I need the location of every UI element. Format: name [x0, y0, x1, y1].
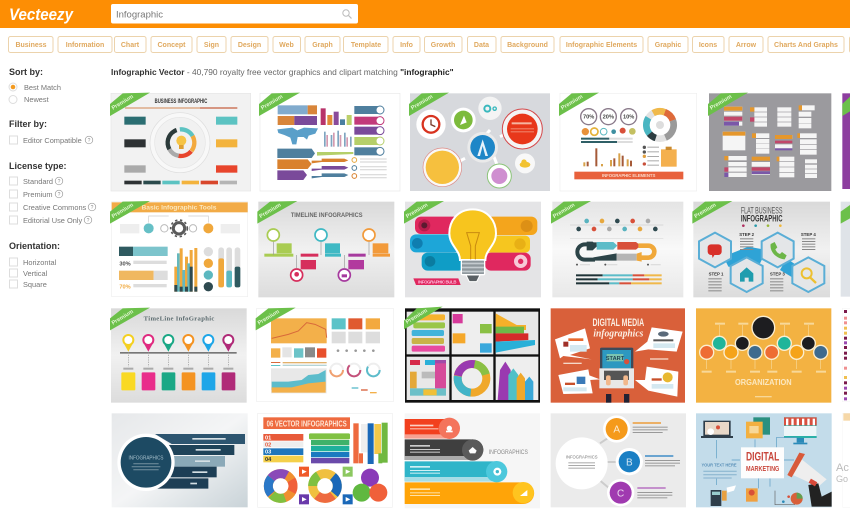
- thumbnail: 06 vector infographics: 06 VECTOR INFOGRAPHICS: [267, 418, 347, 428]
- thumbnail: digital marketing: DIGITAL: [746, 450, 779, 464]
- filter by: ?: [88, 138, 91, 144]
- thumbnail: network circles infographic: [409, 93, 550, 191]
- thumbnail: 06 vector infographics: 01: [265, 435, 271, 441]
- filter by: Editor Compatible: [23, 136, 82, 145]
- tag row: Information: [66, 42, 104, 49]
- thumbnail: flat business infographic: STEP 2: [739, 232, 755, 237]
- thumbnail: 06 vector infographics: 02: [265, 443, 271, 449]
- license type: ?: [91, 205, 94, 211]
- tag row: Concept: [158, 42, 186, 49]
- premium ribbon: Premium: [709, 94, 733, 112]
- thumbnail: digital marketing: [696, 413, 832, 507]
- premium ribbon: Premium: [257, 309, 281, 327]
- thumbnail: black grid of charts: [404, 307, 540, 403]
- tag row: Arrow: [736, 42, 757, 49]
- thumbnail: infographic elements: [559, 93, 697, 191]
- license type: [9, 161, 96, 225]
- tag row: Icons: [699, 42, 717, 49]
- premium ribbon: Premium: [260, 94, 284, 112]
- tag row: Growth: [431, 42, 455, 49]
- thumbnail: timeline pins: [110, 308, 247, 403]
- premium ribbon: Premium: [552, 202, 576, 220]
- premium ribbon: [409, 93, 449, 116]
- thumbnail: light bulb infographic: [404, 201, 541, 297]
- thumbnail: infographic elements: 20%: [603, 115, 614, 121]
- license type: Premium: [23, 190, 53, 199]
- license type: Standard: [23, 177, 53, 186]
- tag row: Graphic: [655, 42, 681, 49]
- premium ribbon: Premium: [111, 202, 135, 220]
- orientation: Square: [23, 280, 47, 289]
- license type: Editorial Use Only: [23, 216, 82, 225]
- thumbnail: rounded bands infographics: INFOGRAPHICS: [489, 449, 528, 456]
- thumbnail: infographic elements: 70%: [583, 115, 594, 121]
- premium ribbon: Premium: [111, 94, 135, 112]
- logo: Vecteezy: [9, 5, 74, 24]
- tag row: Template: [351, 42, 381, 49]
- premium ribbon: Premium: [694, 202, 717, 220]
- thumbnail: digital media infographics: DIGITAL MEDIA: [592, 317, 644, 329]
- sidebar filters: [9, 67, 96, 289]
- thumbnail: basic infographic tools: Basic Infographic Tools: [142, 204, 217, 211]
- license type: Creative Commons: [23, 203, 87, 212]
- tag row: Charts And Graphs: [774, 42, 838, 49]
- thumbnail: timeline infographics: [257, 201, 394, 297]
- watermark text: Ac: [836, 462, 849, 474]
- thumbnail: dashboard charts: [256, 308, 393, 402]
- watermark text: Go: [836, 474, 848, 484]
- orientation: Horizontal: [23, 258, 57, 267]
- tag row: Background: [507, 42, 548, 49]
- thumbnail: flat business infographic: STEP 1: [709, 272, 724, 277]
- search box: Infographic: [116, 10, 163, 20]
- thumbnail: purple card, clipped: [842, 93, 850, 189]
- thumbnail: clipped swatch card: [842, 308, 850, 402]
- tag row: Design: [238, 42, 261, 49]
- thumbnail: digital media infographics: infographics: [593, 329, 643, 340]
- thumbnail: organization chart: ORGANIZATION: [735, 378, 792, 387]
- tag row: Graph: [312, 42, 333, 49]
- thumbnail: A B C circles: [551, 413, 686, 507]
- orientation: Vertical: [23, 269, 48, 278]
- tag row: Sign: [204, 42, 219, 49]
- header bar: [0, 0, 850, 28]
- license type: ?: [58, 192, 61, 198]
- thumbnail: A B C circles: INFOGRAPHICS: [566, 454, 598, 460]
- filter by: [9, 119, 93, 145]
- premium ribbon: [110, 93, 150, 116]
- orientation: Orientation:: [9, 241, 60, 251]
- watermark text: [836, 462, 849, 484]
- sort by: Newest: [24, 95, 49, 104]
- sort by: [9, 67, 61, 104]
- tag row: Data: [474, 42, 489, 49]
- thumbnail: digital marketing: YOUR TEXT HERE: [701, 463, 737, 469]
- thumbnail: A B C circles: C: [617, 489, 624, 500]
- thumbnail: rounded bands infographics: [405, 413, 540, 508]
- thumbnail: flat business infographic: [692, 201, 830, 297]
- tag row: Business: [15, 42, 47, 49]
- thumbnail: flat business infographic: INFOGRAPHIC: [741, 213, 783, 223]
- thumbnail: A B C circles: B: [626, 457, 633, 468]
- thumbnail: digital media infographics: START: [606, 356, 625, 362]
- thumbnail: 06 vector infographics: 04: [265, 457, 272, 463]
- license type: License type:: [9, 161, 67, 171]
- thumbnail: gray tables: [708, 93, 831, 191]
- thumbnail: organization chart: [696, 308, 831, 403]
- thumbnail: arrow timeline infographic: [551, 201, 683, 297]
- thumbnail: flat business infographic: STEP 3: [770, 272, 785, 277]
- thumbnail: stacked dark tabs: [112, 413, 248, 507]
- premium ribbon: Premium: [560, 94, 584, 112]
- thumbnail: 06 vector infographics: 03: [265, 450, 271, 456]
- premium ribbon: Premium: [410, 94, 434, 112]
- results heading: Infographic Vector - 40,790 royalty free vector graphics and clipart matching "infographic": [111, 67, 454, 77]
- tag row: Chart: [121, 42, 140, 49]
- premium ribbon: Premium: [405, 308, 429, 326]
- premium ribbon: Premium: [111, 309, 135, 327]
- thumbnail: light bulb infographic: INFOGRAPHIC BULB: [418, 279, 456, 284]
- thumbnail: clipped white card: [843, 413, 850, 507]
- thumbnail: business infographic: [110, 93, 251, 191]
- thumbnail: infographic elements: 10%: [623, 115, 634, 121]
- tag row: [8, 36, 850, 52]
- thumbnail: A B C circles: A: [613, 425, 620, 436]
- thumbnail: stacked dark tabs: INFOGRAPHICS: [128, 455, 164, 461]
- filter by: Filter by:: [9, 119, 47, 129]
- tag row: Infographic Elements: [566, 42, 637, 49]
- thumbnail: world map infographic: [259, 93, 400, 191]
- thumbnail: business infographic: BUSINESS INFOGRAPHIC: [155, 98, 207, 105]
- premium ribbon: Premium: [405, 202, 429, 220]
- thumbnail: 06 vector infographics: [258, 413, 392, 507]
- premium ribbon: [259, 93, 300, 116]
- thumbnail: basic infographic tools: 70%: [119, 285, 131, 291]
- thumbnail: digital media infographics: [551, 308, 685, 403]
- license type: ?: [58, 179, 61, 185]
- thumbnail: basic infographic tools: [110, 201, 248, 297]
- tag row: Info: [400, 42, 413, 49]
- thumbnail: flat business infographic: STEP 4: [801, 232, 816, 237]
- thumbnail: timeline infographics: TIMELINE INFOGRAPHICS: [291, 212, 363, 219]
- thumbnail: basic infographic tools: 30%: [119, 261, 131, 267]
- thumbnail: flat business infographic: FLAT BUSINESS: [741, 205, 782, 215]
- premium ribbon: Premium: [259, 202, 282, 220]
- tag row: Web: [279, 42, 294, 49]
- sort by: Best Match: [24, 83, 61, 92]
- thumbnail: infographic elements: INFOGRAPHIC ELEMENTS: [602, 173, 655, 178]
- sort by: Sort by:: [9, 67, 43, 77]
- orientation: [9, 241, 60, 289]
- license type: ?: [87, 218, 90, 224]
- thumbnail: gray-blue card, clipped: [841, 202, 850, 297]
- thumbnail: timeline pins: TimeLine InfoGraphic: [144, 316, 214, 323]
- search box: [111, 4, 358, 24]
- thumbnail: digital marketing: MARKETING: [746, 464, 780, 473]
